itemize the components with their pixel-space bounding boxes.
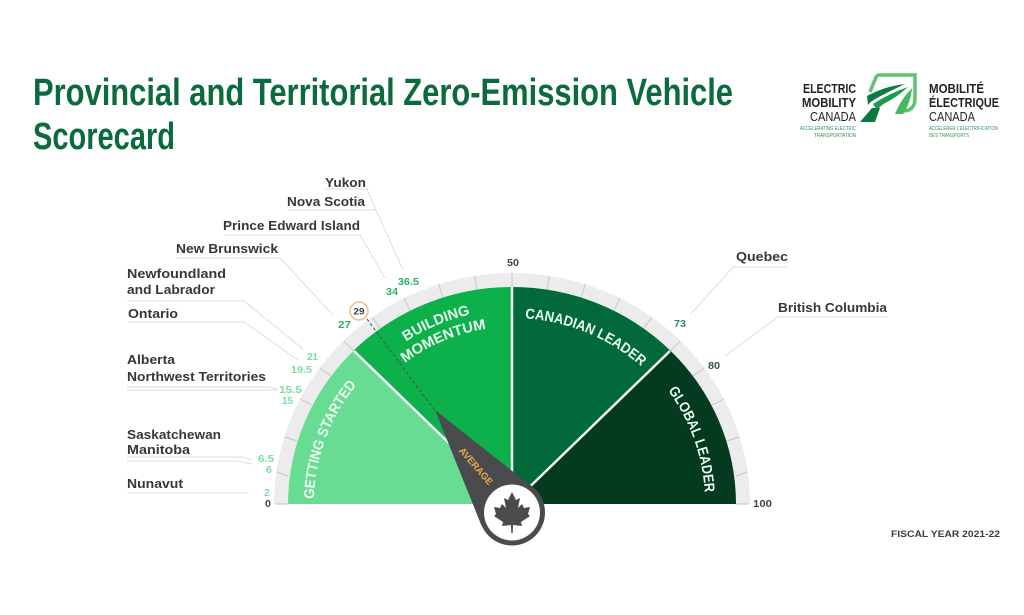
- logo French wordmark: MOBILITÉ: [929, 81, 984, 96]
- logo English wordmark: CANADA: [810, 110, 857, 124]
- province labels: New Brunswick: [176, 241, 279, 256]
- average marker: 29: [350, 302, 368, 320]
- score values: 2: [264, 487, 270, 499]
- logo English wordmark: MOBILITY: [802, 96, 857, 110]
- logo leaf icon: [860, 75, 915, 122]
- needle with maple leaf hub: [435, 410, 545, 546]
- score values: 50: [507, 257, 519, 269]
- segment: Getting Started: [288, 350, 473, 504]
- score values: [258, 257, 772, 510]
- province labels: Quebec: [736, 249, 788, 264]
- segment dividers: [354, 287, 670, 504]
- logo English wordmark: TRANSPORTATION: [814, 133, 856, 139]
- average dashed pointer line: [367, 319, 436, 412]
- segment: Global Leader: [532, 350, 736, 504]
- gauge tick marks: [275, 272, 749, 504]
- segment: Canadian Leader: CANADIAN LEADER: [526, 308, 646, 366]
- title: Provincial and Territorial Zero-Emission Vehicle: [33, 72, 733, 114]
- province labels: and Labrador: [127, 282, 215, 297]
- province labels: Newfoundland: [127, 266, 226, 281]
- title: Scorecard: [33, 116, 175, 158]
- segment: Building Momentum: MOMENTUM: [400, 319, 486, 362]
- score values: 0: [265, 498, 271, 510]
- score values: 73: [674, 318, 686, 330]
- score values: 27: [338, 319, 351, 331]
- province labels: Yukon: [325, 175, 366, 190]
- segment: Building Momentum: BUILDING: [402, 306, 469, 341]
- logo French wordmark: CANADA: [929, 110, 976, 124]
- province labels: Nunavut: [127, 476, 184, 491]
- province labels: Manitoba: [127, 442, 191, 457]
- segment: Global Leader: GLOBAL LEADER: [670, 386, 714, 492]
- province labels: Northwest Territories: [127, 369, 266, 384]
- segment: Canadian Leader: [513, 287, 670, 485]
- title: [33, 72, 733, 158]
- gauge track: [274, 273, 750, 504]
- score values: 15: [282, 395, 293, 407]
- fiscal year note: FISCAL YEAR 2021-22: [891, 529, 1000, 540]
- score values: 21: [307, 351, 318, 363]
- score values: 15.5: [279, 384, 302, 396]
- logo French wordmark: ÉLECTRIQUE: [929, 95, 999, 110]
- leader lines: [127, 189, 887, 493]
- score values: 19.5: [291, 364, 312, 376]
- score values: 80: [708, 360, 720, 372]
- logo French wordmark: DES TRANSPORTS: [929, 133, 969, 139]
- logo French wordmark: [929, 81, 999, 139]
- score values: 34: [386, 286, 398, 298]
- score values: 36.5: [398, 276, 419, 288]
- province labels: British Columbia: [778, 300, 888, 315]
- score values: 6: [266, 464, 272, 476]
- logo English wordmark: ELECTRIC: [803, 82, 856, 96]
- logo English wordmark: ACCELERATING ELECTRIC: [800, 126, 856, 132]
- score values: 6.5: [258, 453, 274, 465]
- score values: 100: [753, 498, 772, 510]
- logo English wordmark: [800, 82, 857, 139]
- province labels: Alberta: [127, 352, 176, 367]
- province labels: Ontario: [128, 306, 178, 321]
- segment: Getting Started: GETTING STARTED: [304, 380, 354, 498]
- province labels: [127, 175, 888, 491]
- province labels: Nova Scotia: [287, 194, 366, 209]
- needle label: AVERAGE: [456, 446, 495, 488]
- icon: maple leaf: [494, 492, 530, 533]
- segment: Building Momentum: [354, 287, 511, 470]
- logo: Electric Mobility Canada: [800, 75, 999, 139]
- average marker: 29: 29: [354, 306, 364, 318]
- province labels: Saskatchewan: [127, 427, 221, 442]
- logo French wordmark: ACCÉLÉRER L'ÉLECTRIFICATION: [929, 125, 998, 132]
- province labels: Prince Edward Island: [223, 218, 360, 233]
